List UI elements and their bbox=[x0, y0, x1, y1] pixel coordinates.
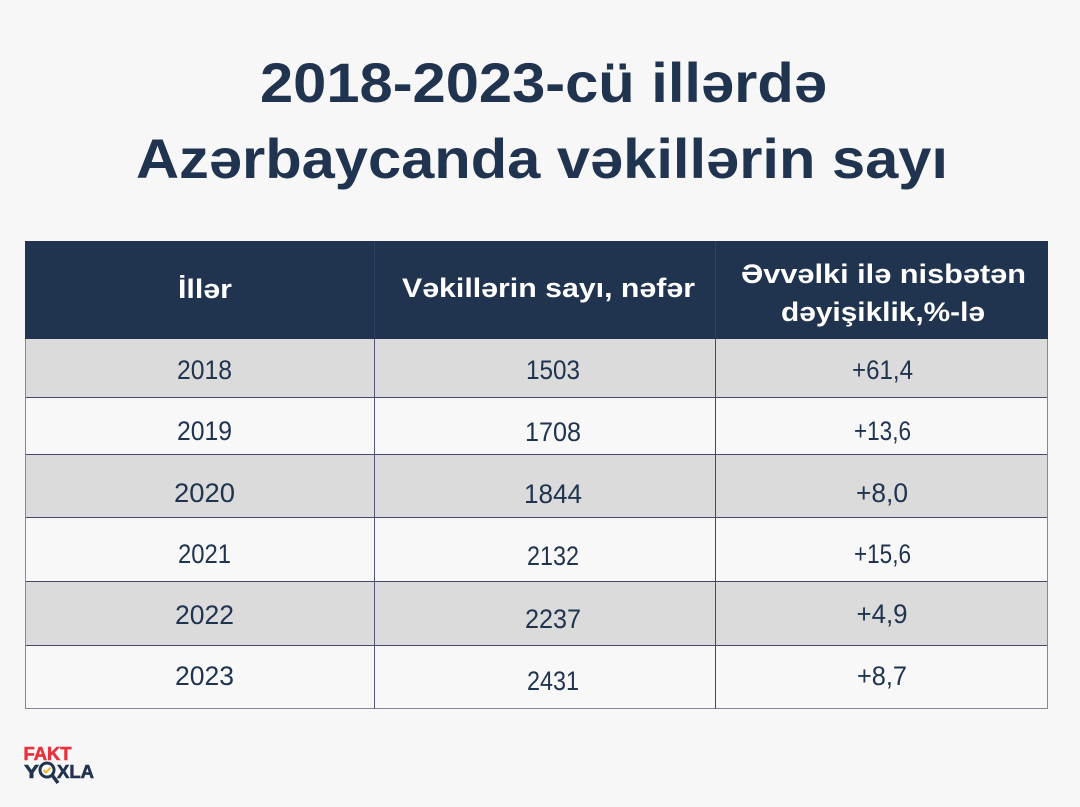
icon: magnifier with check bbox=[40, 763, 58, 783]
title bbox=[136, 51, 948, 190]
row backgrounds bbox=[25, 339, 1048, 709]
logo: Fakt Yoxla: FAKT bbox=[24, 744, 72, 764]
table header row: İllər bbox=[178, 274, 233, 304]
title: 2018-2023-cü illərdə bbox=[260, 51, 827, 114]
column: years: 2018 bbox=[177, 355, 232, 385]
column: lawyer counts: 2431 bbox=[527, 666, 579, 696]
column: percent change: +61,4 bbox=[852, 355, 913, 385]
column: lawyer counts: 1503 bbox=[526, 355, 580, 385]
logo: Fakt Yoxla: Y bbox=[24, 762, 39, 782]
table header row: dəyişiklik,%-lə bbox=[781, 297, 985, 327]
column: years: 2022 bbox=[175, 600, 234, 630]
column: percent change: +15,6 bbox=[854, 539, 911, 569]
column: percent change: +8,0 bbox=[856, 478, 908, 508]
column: years: 2019 bbox=[177, 416, 232, 446]
table header row: Vəkillərin sayı, nəfər bbox=[402, 273, 696, 303]
column: lawyer counts bbox=[524, 355, 582, 696]
column: percent change: +8,7 bbox=[857, 661, 907, 691]
logo: Fakt Yoxla: XLA bbox=[57, 762, 94, 782]
column: years: 2021 bbox=[178, 539, 231, 569]
column: lawyer counts: 1844 bbox=[524, 479, 582, 509]
column: years: 2020 bbox=[174, 478, 235, 508]
title: Azərbaycanda vəkillərin sayı bbox=[136, 127, 948, 190]
column: lawyer counts: 2132 bbox=[527, 541, 579, 571]
logo: Fakt Yoxla bbox=[24, 744, 94, 783]
column: percent change bbox=[852, 355, 913, 691]
table header row bbox=[25, 241, 1048, 339]
column: percent change: +13,6 bbox=[854, 416, 911, 446]
data table bbox=[25, 241, 1048, 709]
column: years: 2023 bbox=[175, 661, 234, 691]
table header row: Əvvəlki ilə nisbətən bbox=[741, 259, 1026, 289]
column: percent change: +4,9 bbox=[856, 599, 908, 629]
column: lawyer counts: 2237 bbox=[525, 604, 581, 634]
column: years bbox=[174, 355, 235, 691]
column: lawyer counts: 1708 bbox=[525, 417, 581, 447]
